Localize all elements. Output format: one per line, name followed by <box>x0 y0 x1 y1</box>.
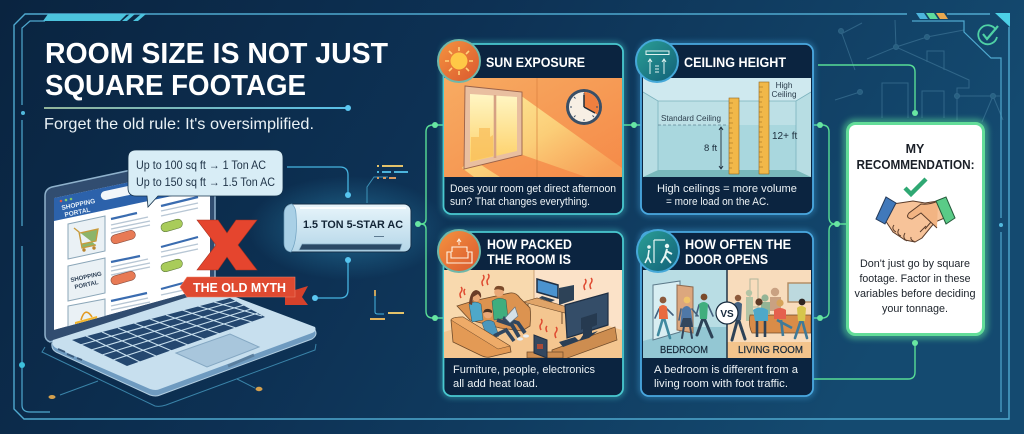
recommendation text <box>854 258 976 315</box>
laptop <box>42 152 316 406</box>
illustration: room with rulers <box>643 78 811 177</box>
heading: CEILING HEIGHT <box>684 54 786 70</box>
panel: how often the door opens: living room with foot traffic. <box>654 378 788 390</box>
icon: red X <box>197 220 257 270</box>
laptop screen: SHOPPING <box>70 271 103 284</box>
recommendation text: Don't just go by square <box>860 258 970 270</box>
panel: ceiling height: High ceilings = more volume <box>657 183 797 195</box>
panel: my recommendation <box>846 122 985 336</box>
illustration: bedroom vs living room <box>643 270 812 358</box>
heading: MY <box>906 142 925 156</box>
icon: sun <box>438 40 480 82</box>
panel: how packed the room is: all add heat load. <box>453 378 538 390</box>
illustration: crowded living room <box>444 270 622 360</box>
title <box>45 38 388 102</box>
speech bubble: old rule <box>128 150 283 207</box>
title: ROOM SIZE IS NOT JUST <box>45 38 388 70</box>
heading <box>685 236 791 267</box>
VS badge: VS <box>720 309 734 320</box>
person: man with laptop <box>492 286 529 341</box>
background house network <box>835 20 1003 122</box>
router box <box>534 335 547 358</box>
decorative data dashes <box>370 166 408 319</box>
sofa front <box>451 317 511 357</box>
panel: sun exposure: sun? That changes everything. <box>450 196 590 208</box>
heading <box>487 236 572 267</box>
heading: HOW OFTEN THE <box>685 236 791 252</box>
icon: corner check badge <box>978 25 998 44</box>
panel: how often the door opens <box>637 230 813 396</box>
recommendation text: footage. Factor in these <box>860 273 970 285</box>
walking people left <box>655 305 713 338</box>
recommendation text: your tonnage. <box>882 303 948 315</box>
illustration: room with rulers: High <box>776 81 793 90</box>
illustration: room with rulers: Ceiling <box>771 90 797 99</box>
AC unit: 1.5 TON 5-STAR AC <box>303 219 403 231</box>
TV console <box>552 327 617 360</box>
icon: ceiling arrows <box>636 40 678 82</box>
illustration: bedroom vs living room: LIVING ROOM <box>738 345 803 356</box>
laptop ground outline <box>42 344 316 406</box>
heading: RECOMMENDATION: <box>856 158 974 172</box>
heading: HOW PACKED <box>487 236 572 252</box>
heading <box>856 142 974 172</box>
ribbon: the old myth: THE OLD MYTH <box>193 281 286 295</box>
living room scene <box>788 283 812 302</box>
icon: sofa <box>438 230 480 272</box>
panel: how packed the room is: Furniture, people, electronics <box>453 364 595 376</box>
title: SQUARE FOOTAGE <box>45 70 306 102</box>
person: woman <box>469 290 483 322</box>
illustration: room with rulers: 12+ ft <box>772 131 798 142</box>
panel: sun exposure <box>438 40 623 214</box>
panel: sun exposure: Does your room get direct afternoon <box>450 183 616 195</box>
illustration: room with rulers: 8 ft <box>704 143 718 154</box>
heat marks <box>460 274 592 338</box>
ribbon: the old myth <box>180 277 308 305</box>
panel: how often the door opens: A bedroom is different from a <box>654 364 799 376</box>
icon: door and walker <box>637 230 679 272</box>
title rule <box>44 105 351 111</box>
speech bubble: old rule: Up to 100 sq ft → 1 Ton AC <box>136 158 266 172</box>
panel: how packed the room is <box>438 230 623 396</box>
illustration: sunny window <box>444 78 622 177</box>
panel: ceiling height <box>636 40 813 214</box>
laptop trackpad <box>176 334 259 367</box>
heading: THE ROOM IS <box>487 251 571 267</box>
illustration: room with rulers: Standard Ceiling <box>661 114 721 123</box>
recommendation text: variables before deciding <box>854 288 976 300</box>
connectors: green bracket to cards <box>415 65 918 379</box>
laptop keyboard <box>72 298 265 366</box>
panel: ceiling height: = more load on the AC. <box>666 196 769 208</box>
TV <box>565 293 608 338</box>
connectors: laptop to AC <box>287 167 388 314</box>
laptop screen: PORTAL <box>74 280 99 291</box>
laptop base <box>52 292 316 396</box>
person: boy <box>482 309 514 341</box>
heading: SUN EXPOSURE <box>486 54 585 70</box>
laptop screen <box>54 182 210 330</box>
subtitle: Forget the old rule: It's oversimplified. <box>44 116 314 133</box>
icon: handshake <box>876 197 955 242</box>
speech bubble: old rule: Up to 150 sq ft → 1.5 Ton AC <box>136 175 275 189</box>
AC unit <box>248 176 448 280</box>
laptop lid <box>45 152 215 342</box>
VS badge <box>716 302 738 324</box>
laptop screen: PORTAL <box>64 207 91 219</box>
laptop screen: SHOPPING <box>61 198 96 212</box>
desk and computer <box>523 298 567 313</box>
sofa back <box>457 293 530 331</box>
heading: DOOR OPENS <box>685 251 768 267</box>
room labels: BEDROOM <box>660 345 708 356</box>
icon: check mark <box>905 179 926 194</box>
